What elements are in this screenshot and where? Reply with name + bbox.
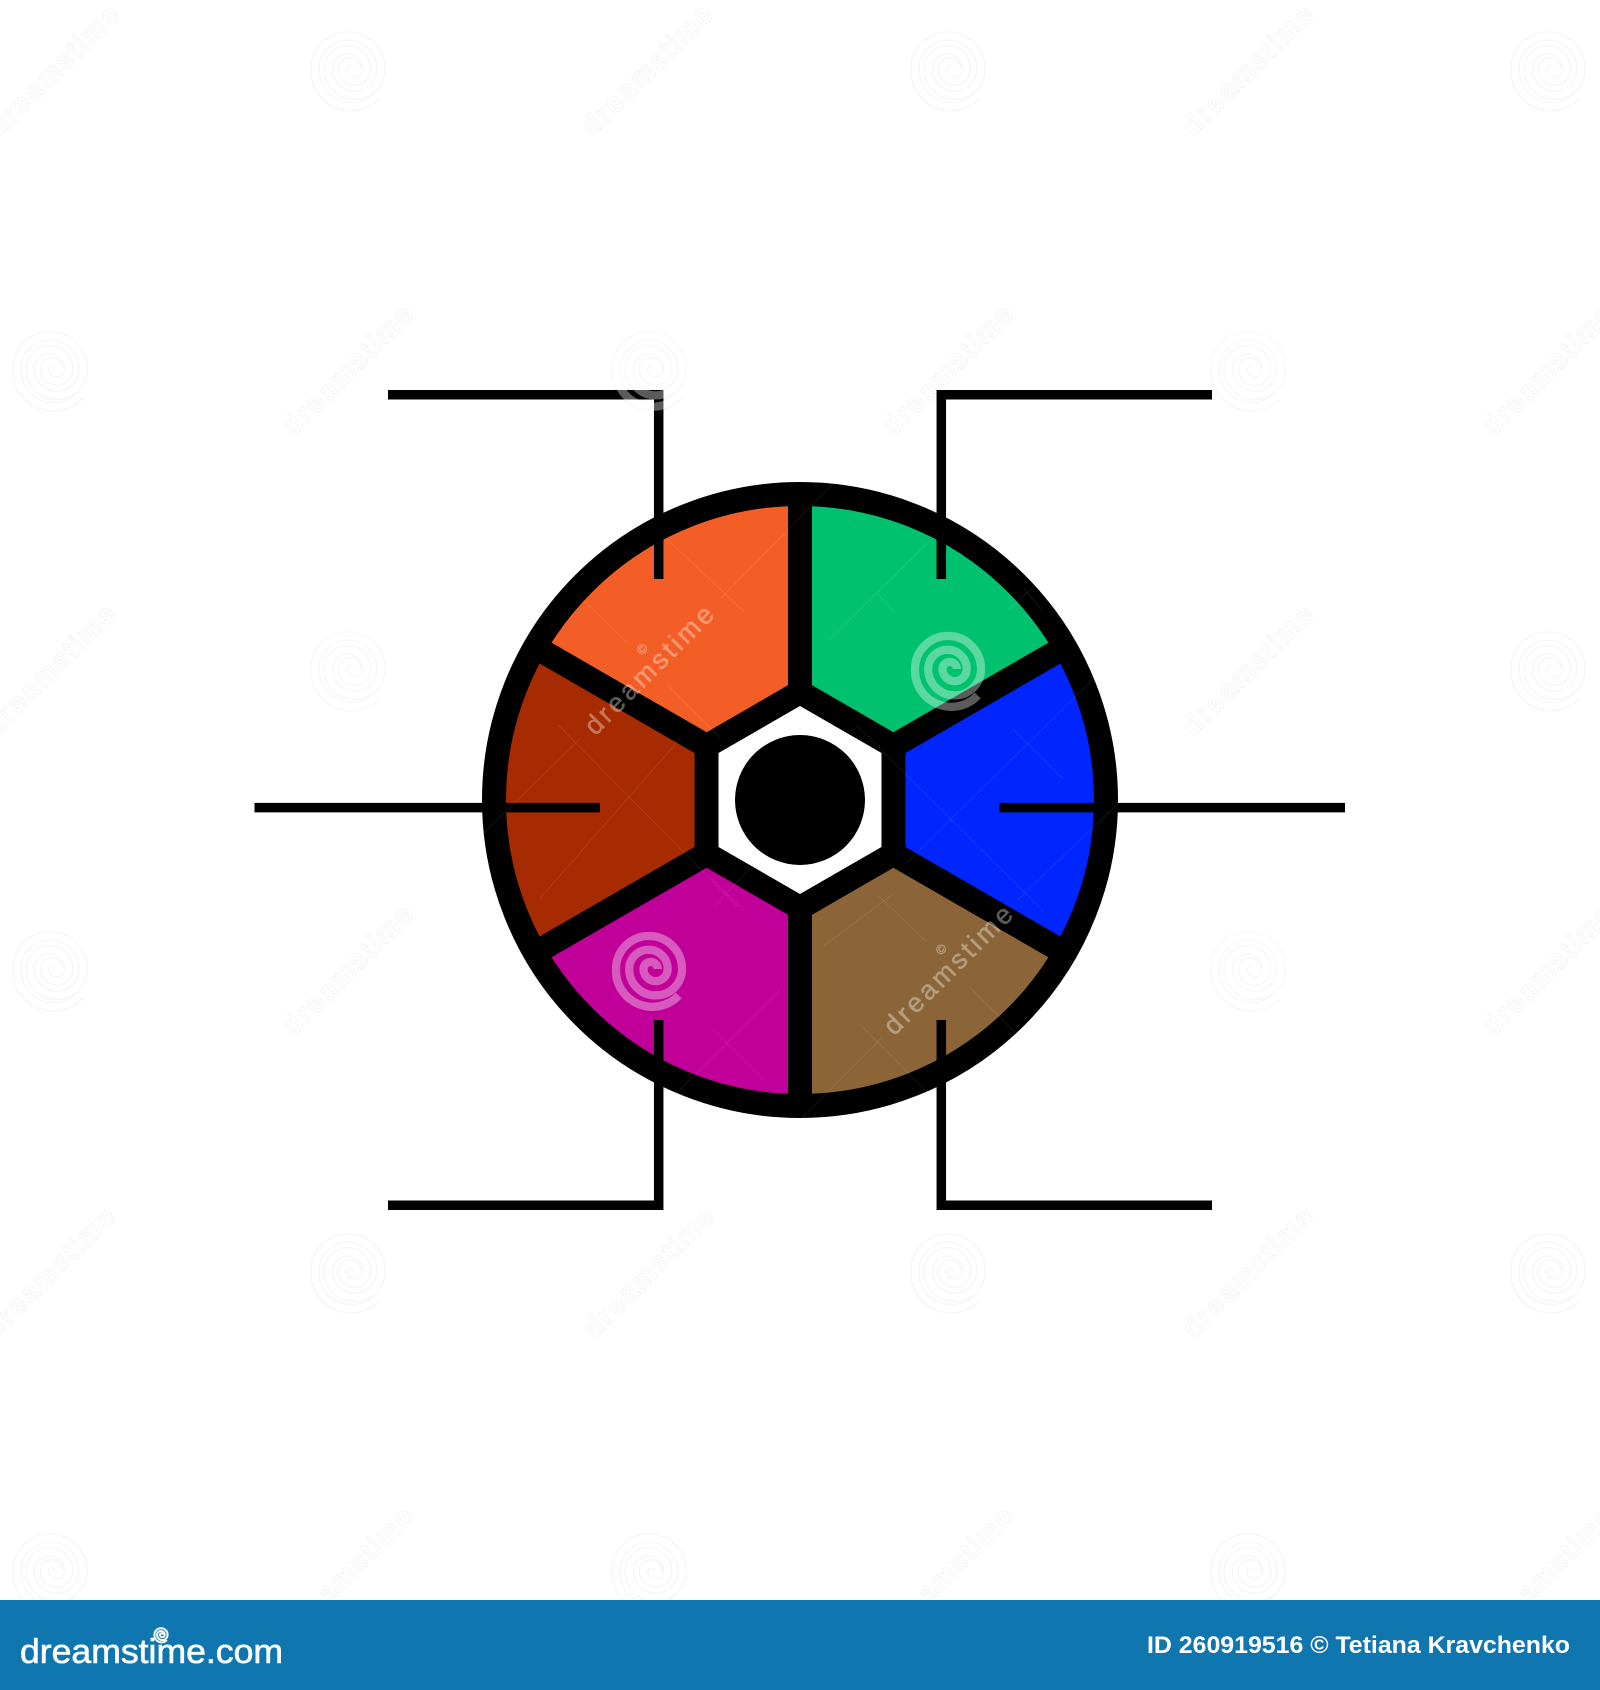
spokes [535, 494, 1065, 1106]
segment: green [800, 494, 1065, 800]
connector: top right [941, 395, 1212, 579]
watermark outlines on white: dreamstime [1177, 1201, 1319, 1343]
footer logo text: dreamstime.com [20, 1633, 283, 1671]
watermark overlay: dreamstime [877, 899, 1019, 1041]
footer credit: ID 260919516 © Tetiana Kravchenko [1147, 1632, 1570, 1659]
connector: middle right [1000, 803, 1345, 812]
wheel diagram [494, 494, 1106, 1106]
watermark overlay: dreamstime [578, 599, 720, 741]
outer ring [494, 494, 1106, 1106]
connector: top left [388, 395, 659, 579]
watermark overlay: © [633, 640, 651, 658]
segment: brown [800, 800, 1065, 1106]
watermark outlines on white: dreamstime [578, 1201, 720, 1343]
connector: bottom left [388, 1020, 659, 1205]
watermark outlines on white: dreamstime [877, 299, 1019, 441]
segment: magenta [535, 800, 800, 1106]
footer bar [0, 1600, 1600, 1690]
connector: bottom right [941, 1020, 1212, 1205]
watermark overlay: © [932, 940, 950, 958]
footer logo spiral [154, 1628, 168, 1642]
hexagon outer border [695, 678, 905, 922]
connector: middle left [254, 803, 600, 812]
segment: rust red [494, 647, 800, 953]
watermark outlines on white: dreamstime [277, 1501, 419, 1643]
centre black circle [735, 735, 865, 865]
watermark overlay [315, 336, 1281, 1117]
watermark outlines on white: dreamstime [1177, 599, 1319, 741]
watermark outlines on white: dreamstime [877, 1501, 1019, 1643]
segment: blue [800, 647, 1106, 953]
watermark outlines on white: dreamstime [277, 899, 419, 1041]
segment: orange [535, 494, 800, 800]
watermark outlines on white: dreamstime [576, 0, 718, 141]
watermark outlines on white: dreamstime [277, 299, 419, 441]
hexagon white centre [718, 706, 882, 894]
watermark outlines on white: dreamstime [1177, 0, 1319, 141]
